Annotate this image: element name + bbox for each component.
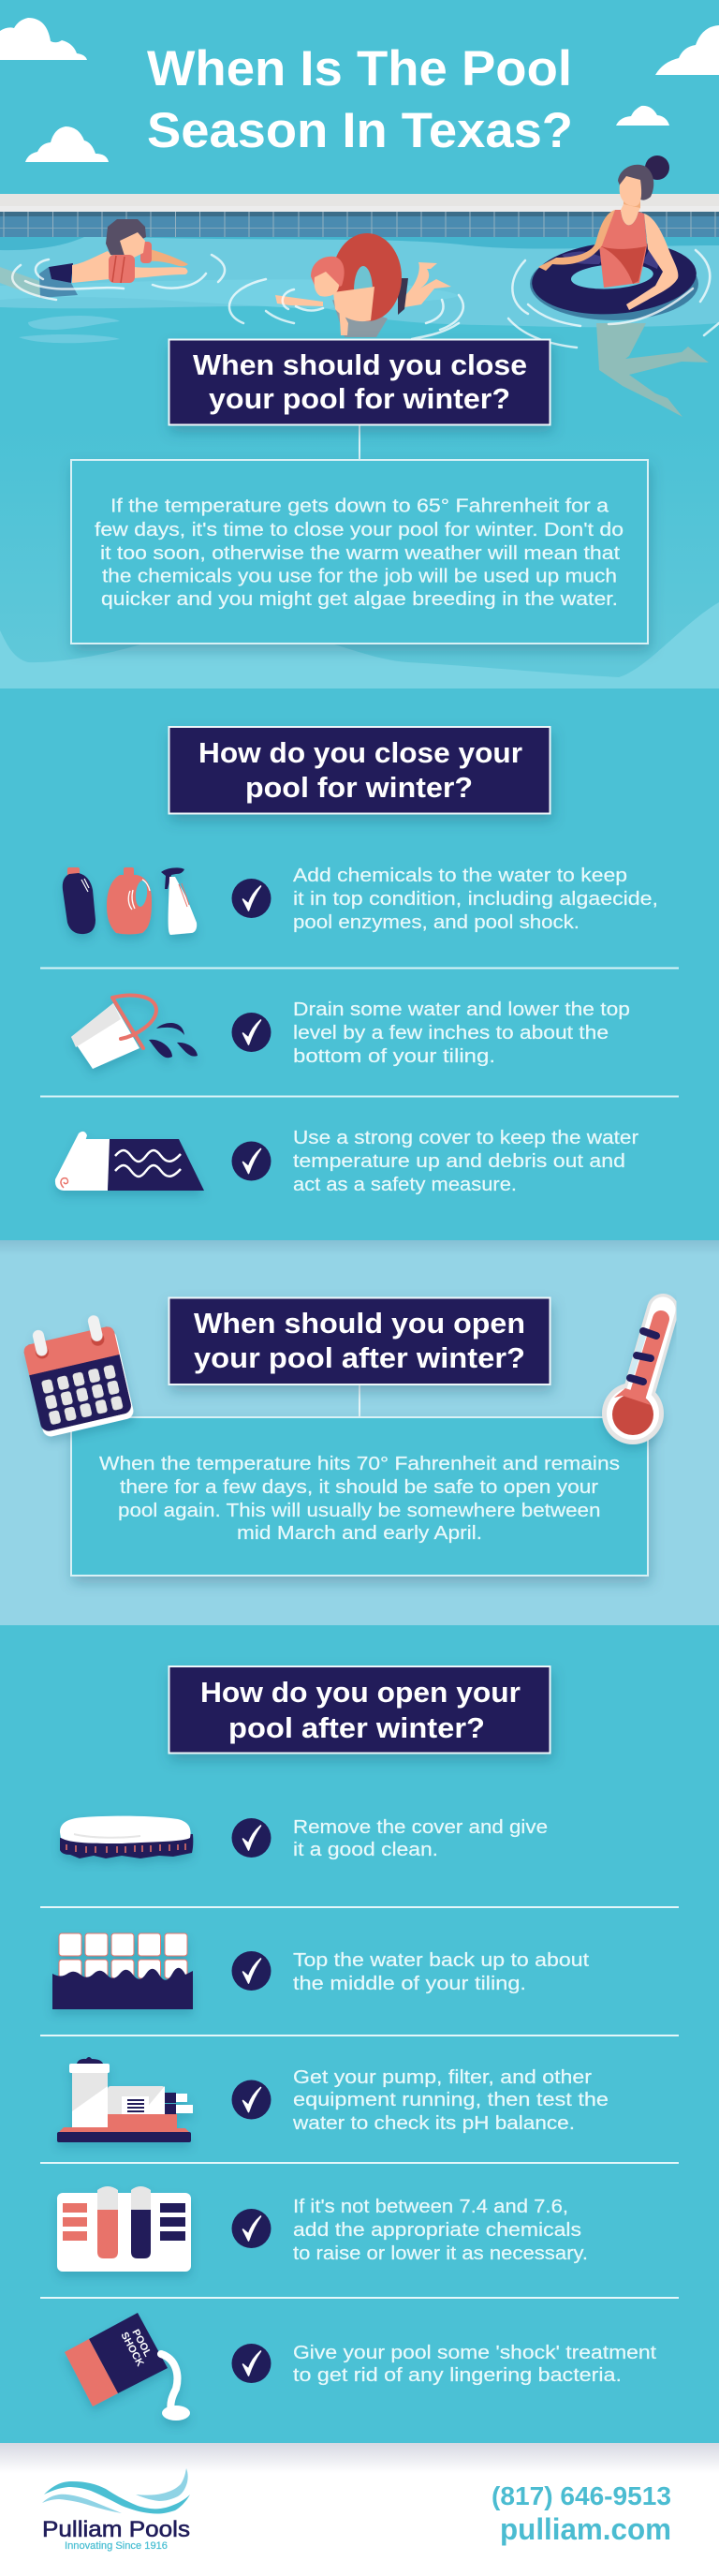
arm bbox=[275, 295, 323, 306]
shorts bbox=[398, 278, 408, 315]
text: run equipment bbox=[292, 2067, 609, 2134]
text box: when to open: there for a few days, it should be safe to open your bbox=[120, 1477, 598, 1498]
swimmer: woman in navy tube bbox=[508, 155, 719, 417]
logo wave bbox=[42, 2468, 190, 2514]
swimsuit bbox=[598, 210, 647, 288]
icon: pool shock packet: SHOCK bbox=[118, 2331, 146, 2369]
icon: chemical bottles bbox=[63, 867, 197, 935]
text box: when to close: few days, it's time to close your pool for winter. Don't do bbox=[95, 520, 624, 540]
tube shadow bbox=[530, 247, 698, 320]
check bbox=[232, 2080, 271, 2119]
logo bbox=[42, 2468, 190, 2552]
text: strong cover: Use a strong cover to keep the water bbox=[293, 1128, 638, 1148]
swim shorts bbox=[39, 263, 78, 298]
check bbox=[232, 1951, 271, 1991]
water bbox=[0, 237, 719, 688]
cloud small right bbox=[616, 106, 669, 126]
check bbox=[232, 2344, 271, 2383]
text box: when to close: quicker and you might get algae breeding in the water. bbox=[101, 589, 618, 610]
heading: how do you open: pool after winter? bbox=[228, 1711, 485, 1744]
panel: how to open bbox=[0, 1625, 719, 2443]
heading: how do you close bbox=[169, 727, 550, 813]
text: drain water: level by a few inches to about the bbox=[293, 1023, 609, 1044]
swimmer: child with arm floats bbox=[0, 219, 225, 300]
icon: pH test kit bbox=[57, 2186, 191, 2272]
text: strong cover bbox=[293, 1128, 638, 1195]
cloud top left bbox=[0, 18, 87, 60]
text box: when to close bbox=[71, 460, 648, 644]
face bbox=[120, 232, 145, 258]
text box: when to open: pool again. This will usually be somewhere between bbox=[118, 1501, 601, 1521]
connector bbox=[359, 1384, 360, 1417]
icon: pool shock packet bbox=[65, 2313, 190, 2421]
submerged legs bbox=[596, 323, 709, 417]
icon: pool cover bbox=[55, 1132, 204, 1191]
title: Season In Texas? bbox=[147, 103, 573, 158]
check bbox=[232, 2209, 271, 2248]
panel: when to open bbox=[0, 1240, 719, 1625]
tube bbox=[530, 237, 698, 319]
text: strong cover: temperature up and debris out and bbox=[293, 1151, 625, 1172]
pool coping bbox=[0, 194, 719, 212]
text: strong cover: act as a safety measure. bbox=[293, 1175, 517, 1195]
text: add chemicals bbox=[293, 866, 658, 933]
check bbox=[232, 1818, 271, 1858]
connector: close heading to text box bbox=[359, 425, 360, 460]
text box: when to open: When the temperature hits 70° Fahrenheit and remains bbox=[99, 1454, 620, 1474]
left arm bbox=[538, 210, 615, 271]
neck bbox=[624, 197, 640, 211]
torso bbox=[333, 287, 374, 321]
text: drain water: Drain some water and lower the top bbox=[293, 999, 630, 1020]
swimmer: child in red ring bbox=[229, 233, 463, 339]
text: run equipment: water to check its pH balance. bbox=[292, 2113, 575, 2134]
cloud lower left bbox=[25, 126, 109, 162]
text box: when to close: the chemicals you use for the job will be used up much bbox=[102, 566, 617, 586]
icon: pool pump bbox=[57, 2057, 193, 2142]
text: top up water bbox=[293, 1950, 590, 1994]
check bbox=[232, 1013, 271, 1052]
far arm bbox=[148, 249, 188, 266]
right arm bbox=[626, 214, 678, 310]
heading: how do you open bbox=[169, 1666, 550, 1754]
hair bbox=[311, 257, 345, 289]
text: shock treatment: Give your pool some 'shock' treatment bbox=[293, 2343, 656, 2363]
icon: tiles and water bbox=[52, 1933, 193, 2009]
panel: how to close bbox=[0, 688, 719, 1240]
text: adjust pH bbox=[293, 2197, 588, 2264]
hair bbox=[618, 165, 653, 200]
heading: how do you open: How do you open your bbox=[200, 1676, 521, 1709]
icon: calendar bbox=[20, 1311, 135, 1438]
panel: footer bbox=[0, 2443, 719, 2576]
text: top up water: Top the water back up to about bbox=[293, 1950, 590, 1971]
pool tile band bbox=[0, 212, 719, 237]
text box: when to close: If the temperature gets down to 65° Fahrenheit for a bbox=[110, 496, 609, 517]
text: drain water: bottom of your tiling. bbox=[293, 1046, 495, 1067]
near float bbox=[109, 255, 135, 283]
heading: when should you open bbox=[169, 1298, 550, 1384]
ripples bbox=[12, 255, 225, 300]
ripples bbox=[229, 279, 463, 339]
text box: when to open: mid March and early April. bbox=[237, 1523, 482, 1544]
heading: how do you close: pool for winter? bbox=[245, 771, 473, 804]
text: shock treatment bbox=[293, 2343, 656, 2386]
heading: when should you close: When should you close bbox=[193, 348, 527, 381]
phone: (817) 646-9513 bbox=[492, 2481, 671, 2510]
logo tagline: Innovating Since 1916 bbox=[65, 2540, 168, 2552]
icon: bucket bbox=[71, 996, 198, 1069]
torso bbox=[72, 251, 126, 283]
text: run equipment: Get your pump, filter, and other bbox=[293, 2067, 592, 2088]
hair bbox=[106, 219, 146, 256]
text box: when to open bbox=[71, 1417, 648, 1576]
icon: thermometer bbox=[602, 1310, 664, 1444]
text: adjust pH: If it's not between 7.4 and 7.6, bbox=[293, 2197, 568, 2217]
text: add chemicals: it in top condition, including algaecide, bbox=[293, 889, 658, 910]
icon: pool shock packet: POOL bbox=[129, 2328, 154, 2359]
text: drain water bbox=[293, 999, 630, 1067]
heading: when should you open: your pool after winter? bbox=[194, 1341, 525, 1374]
text: add chemicals: pool enzymes, and pool shock. bbox=[293, 912, 580, 933]
icon: brush bbox=[60, 1816, 193, 1858]
red ring bbox=[332, 233, 402, 321]
far float bbox=[140, 242, 152, 263]
bun bbox=[645, 155, 669, 180]
text: top up water: the middle of your tiling. bbox=[293, 1974, 526, 1994]
check bbox=[232, 879, 271, 918]
face bbox=[315, 272, 339, 297]
text box: when to close: it too soon, otherwise the warm weather will mean that bbox=[100, 543, 621, 564]
text: remove cover bbox=[293, 1817, 548, 1860]
check bbox=[232, 1141, 271, 1180]
text: shock treatment: to get rid of any lingering bacteria. bbox=[293, 2365, 622, 2386]
cloud top right bbox=[655, 25, 719, 75]
text: adjust pH: add the appropriate chemicals bbox=[293, 2220, 581, 2241]
chest bbox=[621, 204, 640, 225]
tube inner shade bbox=[562, 245, 662, 269]
sky bbox=[0, 0, 719, 195]
panel: hero pool scene bbox=[0, 0, 719, 688]
title bbox=[147, 41, 573, 158]
trailing legs bbox=[0, 267, 40, 298]
text: adjust pH: to raise or lower it as necessary. bbox=[293, 2243, 588, 2264]
heading: how do you close: How do you close your bbox=[198, 736, 522, 769]
heading: when should you close bbox=[169, 339, 550, 425]
face bbox=[620, 176, 641, 206]
text: remove cover: it a good clean. bbox=[293, 1840, 438, 1860]
text: remove cover: Remove the cover and give bbox=[293, 1817, 548, 1838]
ripples bbox=[508, 250, 719, 348]
text: add chemicals: Add chemicals to the water to keep bbox=[293, 866, 627, 886]
back legs bbox=[403, 262, 451, 307]
submerged body bbox=[332, 300, 388, 337]
website: pulliam.com bbox=[500, 2512, 671, 2546]
text: run equipment: equipment running, then test the bbox=[293, 2090, 609, 2110]
heading: when should you open: When should you open bbox=[194, 1307, 525, 1340]
title: When Is The Pool bbox=[147, 41, 572, 96]
near arm bbox=[134, 267, 187, 278]
logo name: Pulliam Pools bbox=[42, 2517, 190, 2542]
heading: when should you close: your pool for winter? bbox=[209, 382, 510, 415]
